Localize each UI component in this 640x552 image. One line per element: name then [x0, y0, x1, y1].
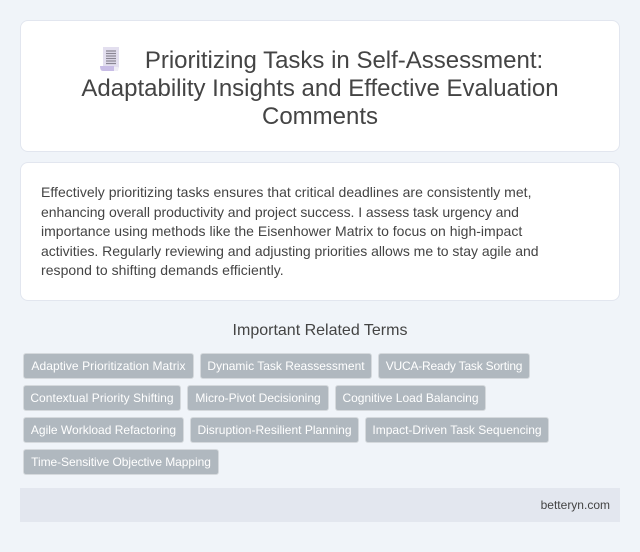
description text line 3: importance using methods like the Eisenhower Matrix to focus on high-impact	[41, 223, 522, 239]
tag	[23, 353, 194, 379]
tag	[23, 385, 181, 411]
tag	[200, 353, 372, 379]
tag	[190, 417, 359, 443]
title card	[20, 20, 620, 152]
title line 1: Prioritizing Tasks in Self-Assessment:	[145, 47, 543, 74]
tag: Adaptive Prioritization Matrix	[31, 359, 186, 373]
tag: Impact-Driven Task Sequencing	[372, 423, 542, 437]
tag	[365, 417, 549, 443]
section heading: Important Related Terms	[233, 322, 407, 339]
description text line 1: Effectively prioritizing tasks ensures that critical deadlines are consistently met,	[41, 184, 532, 200]
tag	[378, 353, 530, 379]
icon: document scroll	[100, 47, 119, 71]
tag	[23, 417, 184, 443]
tag: Micro-Pivot Decisioning	[195, 391, 321, 405]
title line 3: Comments	[262, 103, 378, 130]
description card	[20, 162, 620, 301]
tag: VUCA-Ready Task Sorting	[386, 359, 522, 373]
description text line 4: activities. Regularly reviewing and adjusting priorities allows me to stay agile and	[41, 243, 538, 259]
description text line 2: enhancing overall productivity and project success. I assess task urgency and	[41, 204, 519, 220]
footer bar	[20, 488, 620, 522]
tag: Agile Workload Refactoring	[31, 423, 176, 437]
tag: Time-Sensitive Objective Mapping	[31, 455, 211, 469]
tag: Cognitive Load Balancing	[342, 391, 479, 405]
title line 2: Adaptability Insights and Effective Evaluation	[81, 75, 559, 102]
tag	[23, 449, 219, 475]
tag: Contextual Priority Shifting	[30, 391, 174, 405]
description text line 5: respond to shifting demands efficiently.	[41, 262, 284, 278]
tag: Dynamic Task Reassessment	[207, 359, 365, 373]
tag: Disruption-Resilient Planning	[197, 423, 352, 437]
tag	[187, 385, 329, 411]
tag	[335, 385, 486, 411]
footer text: betteryn.com	[541, 498, 610, 512]
